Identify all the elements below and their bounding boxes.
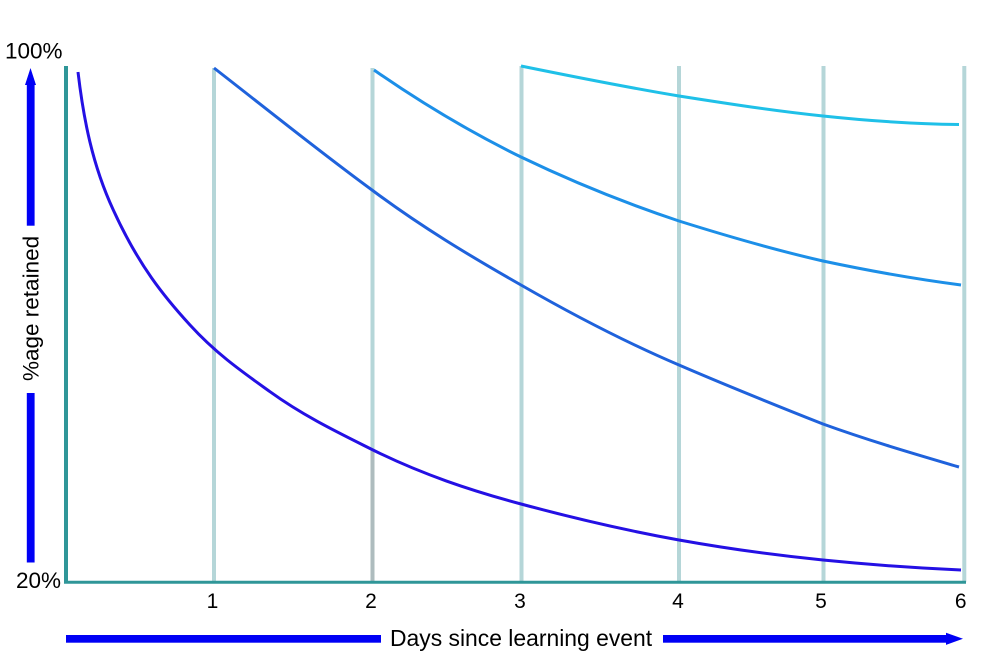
y axis arrow [25, 68, 36, 562]
y axis top label: 100% [5, 38, 63, 64]
axes [64, 66, 966, 583]
x axis tick labels: 1 [207, 590, 218, 613]
x axis tick labels: 6 [955, 590, 967, 613]
y axis bottom label: 20% [16, 568, 61, 593]
curve: second review [214, 68, 959, 467]
y axis title: %age retained [18, 236, 44, 381]
x axis title: Days since learning event [390, 625, 653, 651]
x axis tick labels: 4 [672, 590, 684, 613]
curve: fourth review [521, 66, 959, 124]
x axis tick labels [207, 590, 967, 613]
curve: third review [374, 70, 961, 285]
curve: first review [78, 72, 961, 570]
x axis tick labels: 3 [514, 590, 526, 613]
x axis arrow [66, 633, 963, 645]
x axis tick labels: 5 [815, 590, 827, 613]
x axis tick labels: 2 [365, 590, 377, 613]
